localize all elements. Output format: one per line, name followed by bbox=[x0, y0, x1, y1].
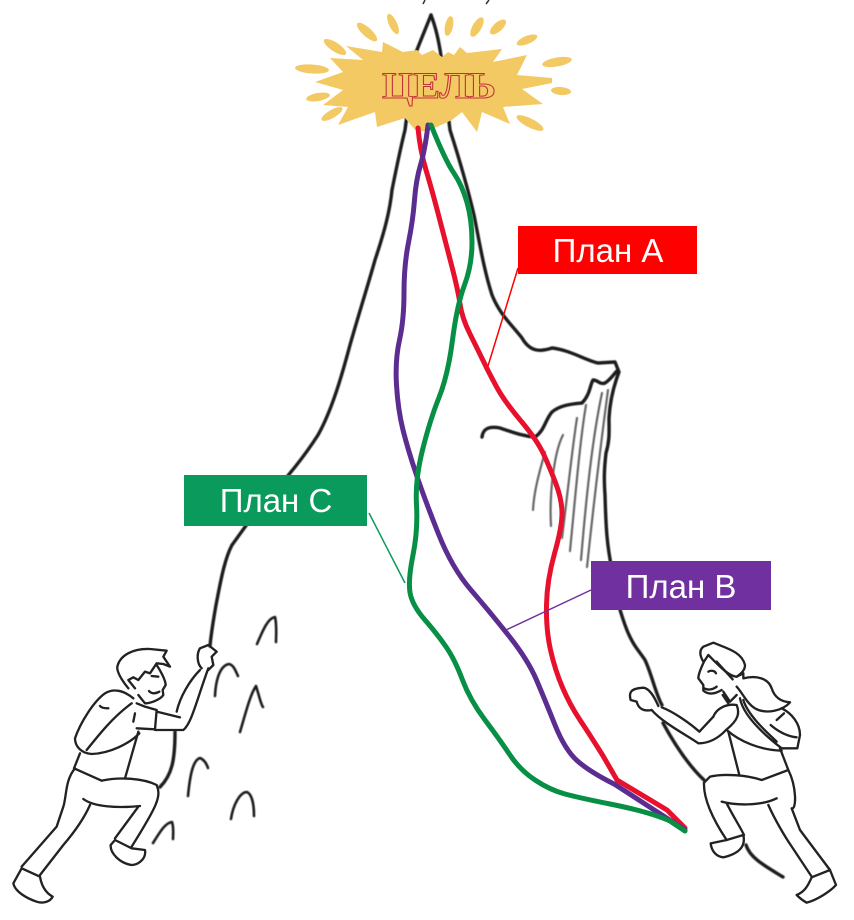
cropped caption remnants at top edge bbox=[423, 0, 489, 4]
label: plan A: План А bbox=[553, 232, 663, 269]
route: plan B bbox=[396, 125, 685, 830]
label: plan B: План В bbox=[626, 568, 736, 605]
mountain outline bbox=[160, 15, 783, 877]
climber: girl with ponytail bbox=[630, 643, 836, 903]
label: plan A bbox=[518, 226, 697, 274]
rock face shading strokes bbox=[533, 390, 608, 567]
burst rays bbox=[295, 12, 573, 134]
burst body bbox=[315, 42, 552, 132]
label: plan B bbox=[591, 561, 771, 610]
leader line: plan B bbox=[506, 590, 591, 630]
goal word: ЦЕЛЬ bbox=[382, 66, 496, 107]
climber: boy with backpack bbox=[13, 645, 217, 903]
route: plan C bbox=[409, 125, 685, 831]
small rock ledges bbox=[153, 617, 276, 843]
label: plan C: План С bbox=[220, 482, 332, 519]
goal starburst bbox=[295, 12, 573, 134]
route: plan A bbox=[418, 128, 685, 828]
leader line: plan C bbox=[369, 513, 405, 583]
leader line: plan A bbox=[488, 268, 518, 366]
label: plan C bbox=[184, 475, 367, 526]
